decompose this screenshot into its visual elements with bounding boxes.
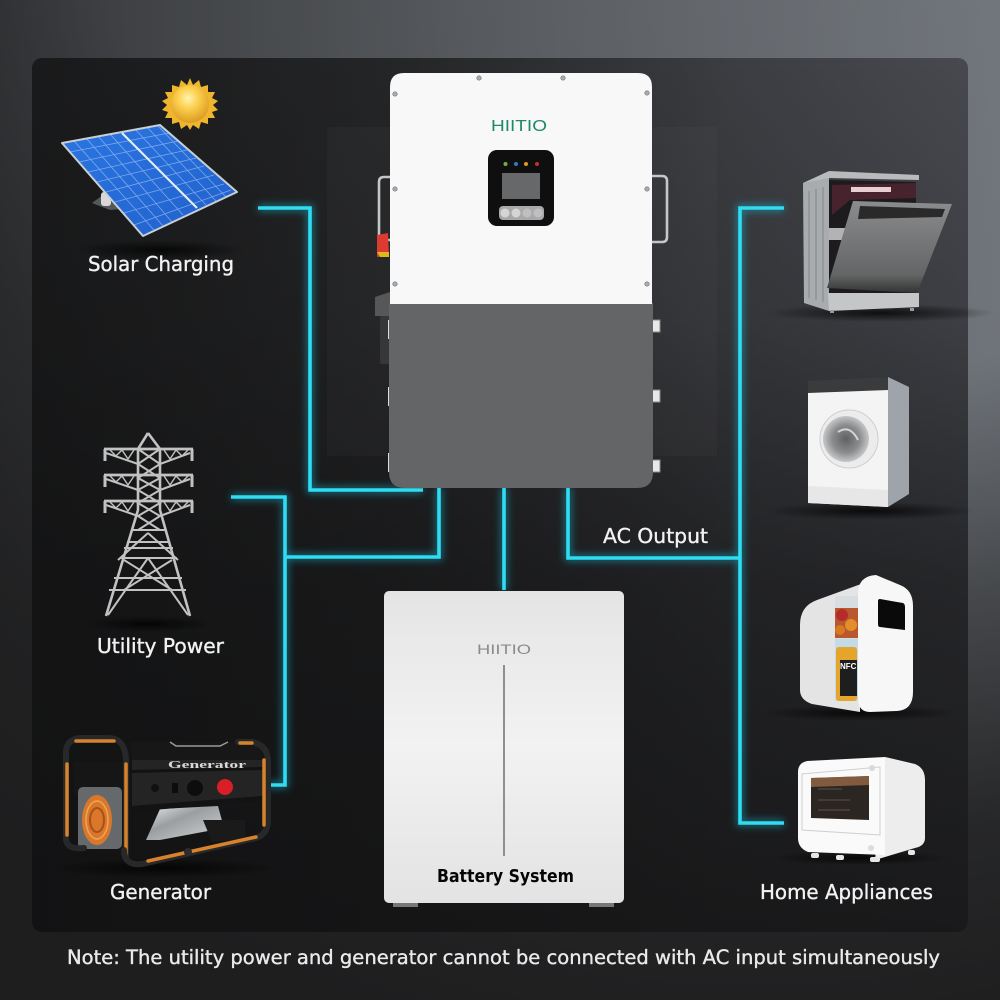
inverter lower grey body	[389, 303, 653, 488]
icon: sun	[162, 78, 218, 130]
connection lines	[231, 208, 784, 823]
battery	[384, 591, 624, 907]
inverter handles	[379, 176, 667, 242]
icon: washing machine	[765, 377, 975, 520]
battery centre line	[503, 665, 505, 856]
inverter left terminals	[388, 320, 391, 472]
note: Note: The utility power and generator cannot be connected with AC input simultaneously	[67, 946, 940, 969]
battery logo: HIITIO	[477, 641, 531, 657]
icon: mini fridge: NFC	[840, 662, 857, 671]
icon: mini fridge	[760, 575, 960, 721]
label: AC Output: AC Output	[603, 524, 708, 548]
icon: generator: Generator	[168, 760, 247, 771]
inverter upper white body	[390, 73, 652, 304]
icon: generator	[50, 738, 280, 878]
inverter red switch	[377, 233, 389, 257]
label: Solar Charging: Solar Charging	[88, 252, 234, 276]
label: Home Appliances: Home Appliances	[760, 880, 933, 904]
label: Generator: Generator	[110, 880, 212, 904]
icon: dishwasher	[765, 171, 995, 322]
inverter	[375, 73, 667, 488]
label: Utility Power: Utility Power	[97, 634, 225, 658]
inverter right terminals	[652, 320, 660, 472]
label: Solar Charging	[75, 240, 245, 276]
label: Battery System: Battery System	[437, 867, 574, 887]
inverter left connector	[375, 292, 390, 364]
inverter logo: HIITIO	[491, 118, 547, 135]
icon: oven	[770, 757, 950, 865]
inverter screws	[393, 76, 649, 286]
inverter control panel	[488, 150, 554, 226]
icon: utility pylon	[83, 433, 213, 632]
icon: solar panel	[62, 125, 237, 236]
